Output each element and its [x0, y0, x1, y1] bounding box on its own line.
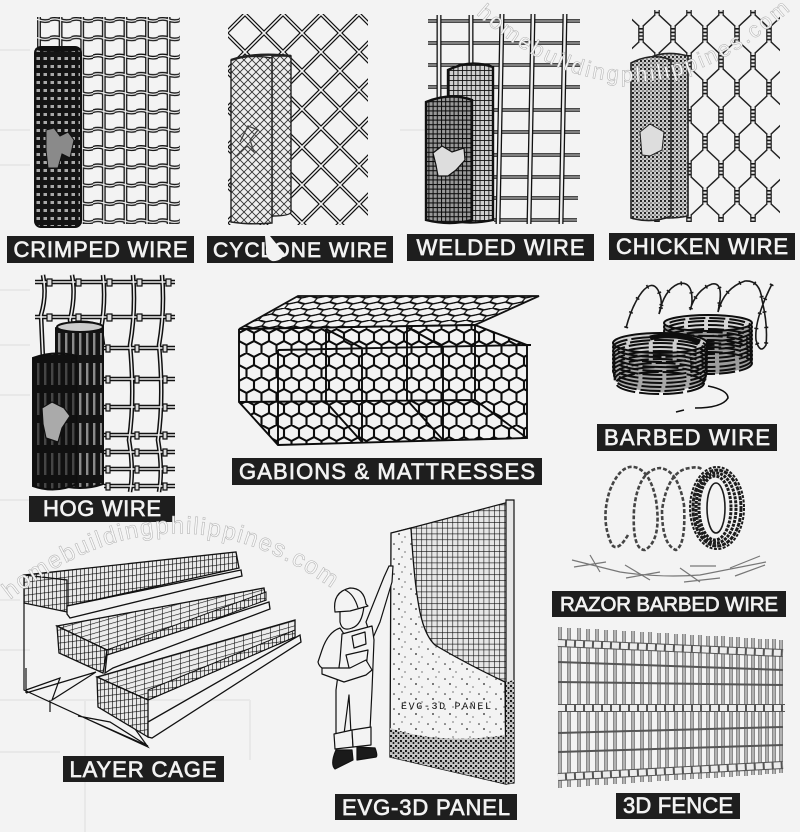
3D fence panel [558, 627, 785, 788]
razor wire strand [572, 555, 766, 582]
label: gabions and mattresses: GABIONS & MATTRESSES [239, 459, 535, 484]
concrete layer: EVG-3D PANEL [401, 702, 491, 713]
panel: razor barbed wire [552, 467, 786, 617]
support frame [24, 603, 148, 747]
cyclone wire roll [231, 55, 291, 224]
label: barbed wire: BARBED WIRE [604, 425, 770, 450]
label: chicken wire: CHICKEN WIRE [616, 234, 788, 259]
hog wire mesh [35, 275, 175, 492]
panel: EVG-3D panel [318, 500, 517, 820]
panel: chicken wire [609, 10, 795, 260]
welded wire rolls [426, 64, 493, 223]
panel: layer cage [24, 552, 301, 782]
welded wire mesh [428, 14, 580, 224]
crimped wire roll [35, 46, 81, 227]
barbed wire coils [613, 315, 752, 412]
label: crimped wire: CRIMPED WIRE [14, 237, 188, 262]
tier 1 cage [24, 552, 242, 618]
label: layer cage: LAYER CAGE [70, 757, 216, 782]
concrete layer [390, 500, 514, 784]
gabion basket [239, 296, 539, 445]
worker figure [318, 566, 393, 769]
panel: welded wire [407, 14, 594, 261]
razor wire loops [605, 467, 702, 550]
chicken wire roll [631, 53, 688, 221]
panel: hog wire [29, 275, 175, 522]
panel: barbed wire [597, 281, 777, 451]
paper tear over label [265, 236, 285, 261]
tier 2 cage [57, 588, 270, 673]
panel: crimped wire [7, 17, 194, 263]
cyclone wire mesh [228, 14, 368, 225]
panel mesh [392, 502, 509, 690]
panel: 3D fence [558, 627, 785, 819]
crimped wire mesh [37, 17, 180, 224]
hog wire rolls [33, 321, 103, 490]
label: cyclone wire: CYCLONE WIRE [213, 239, 387, 262]
label: hog wire: HOG WIRE [43, 496, 161, 521]
label: welded wire: WELDED WIRE [416, 235, 584, 260]
razor wire coil [690, 467, 744, 549]
panel: cyclone wire [207, 14, 393, 263]
watermark: centre left: homebuildingphilippines.com [0, 516, 336, 600]
barbed wire loops [626, 281, 772, 349]
tier 3 cage [97, 620, 301, 738]
label: 3D fence: 3D FENCE [623, 793, 733, 818]
faint show-through of printed table [0, 50, 430, 832]
chicken wire mesh [632, 10, 780, 222]
label: razor barbed wire: RAZOR BARBED WIRE [560, 593, 778, 616]
panel: gabions and mattresses [232, 296, 542, 485]
label: EVG-3D panel: EVG-3D PANEL [342, 795, 510, 820]
